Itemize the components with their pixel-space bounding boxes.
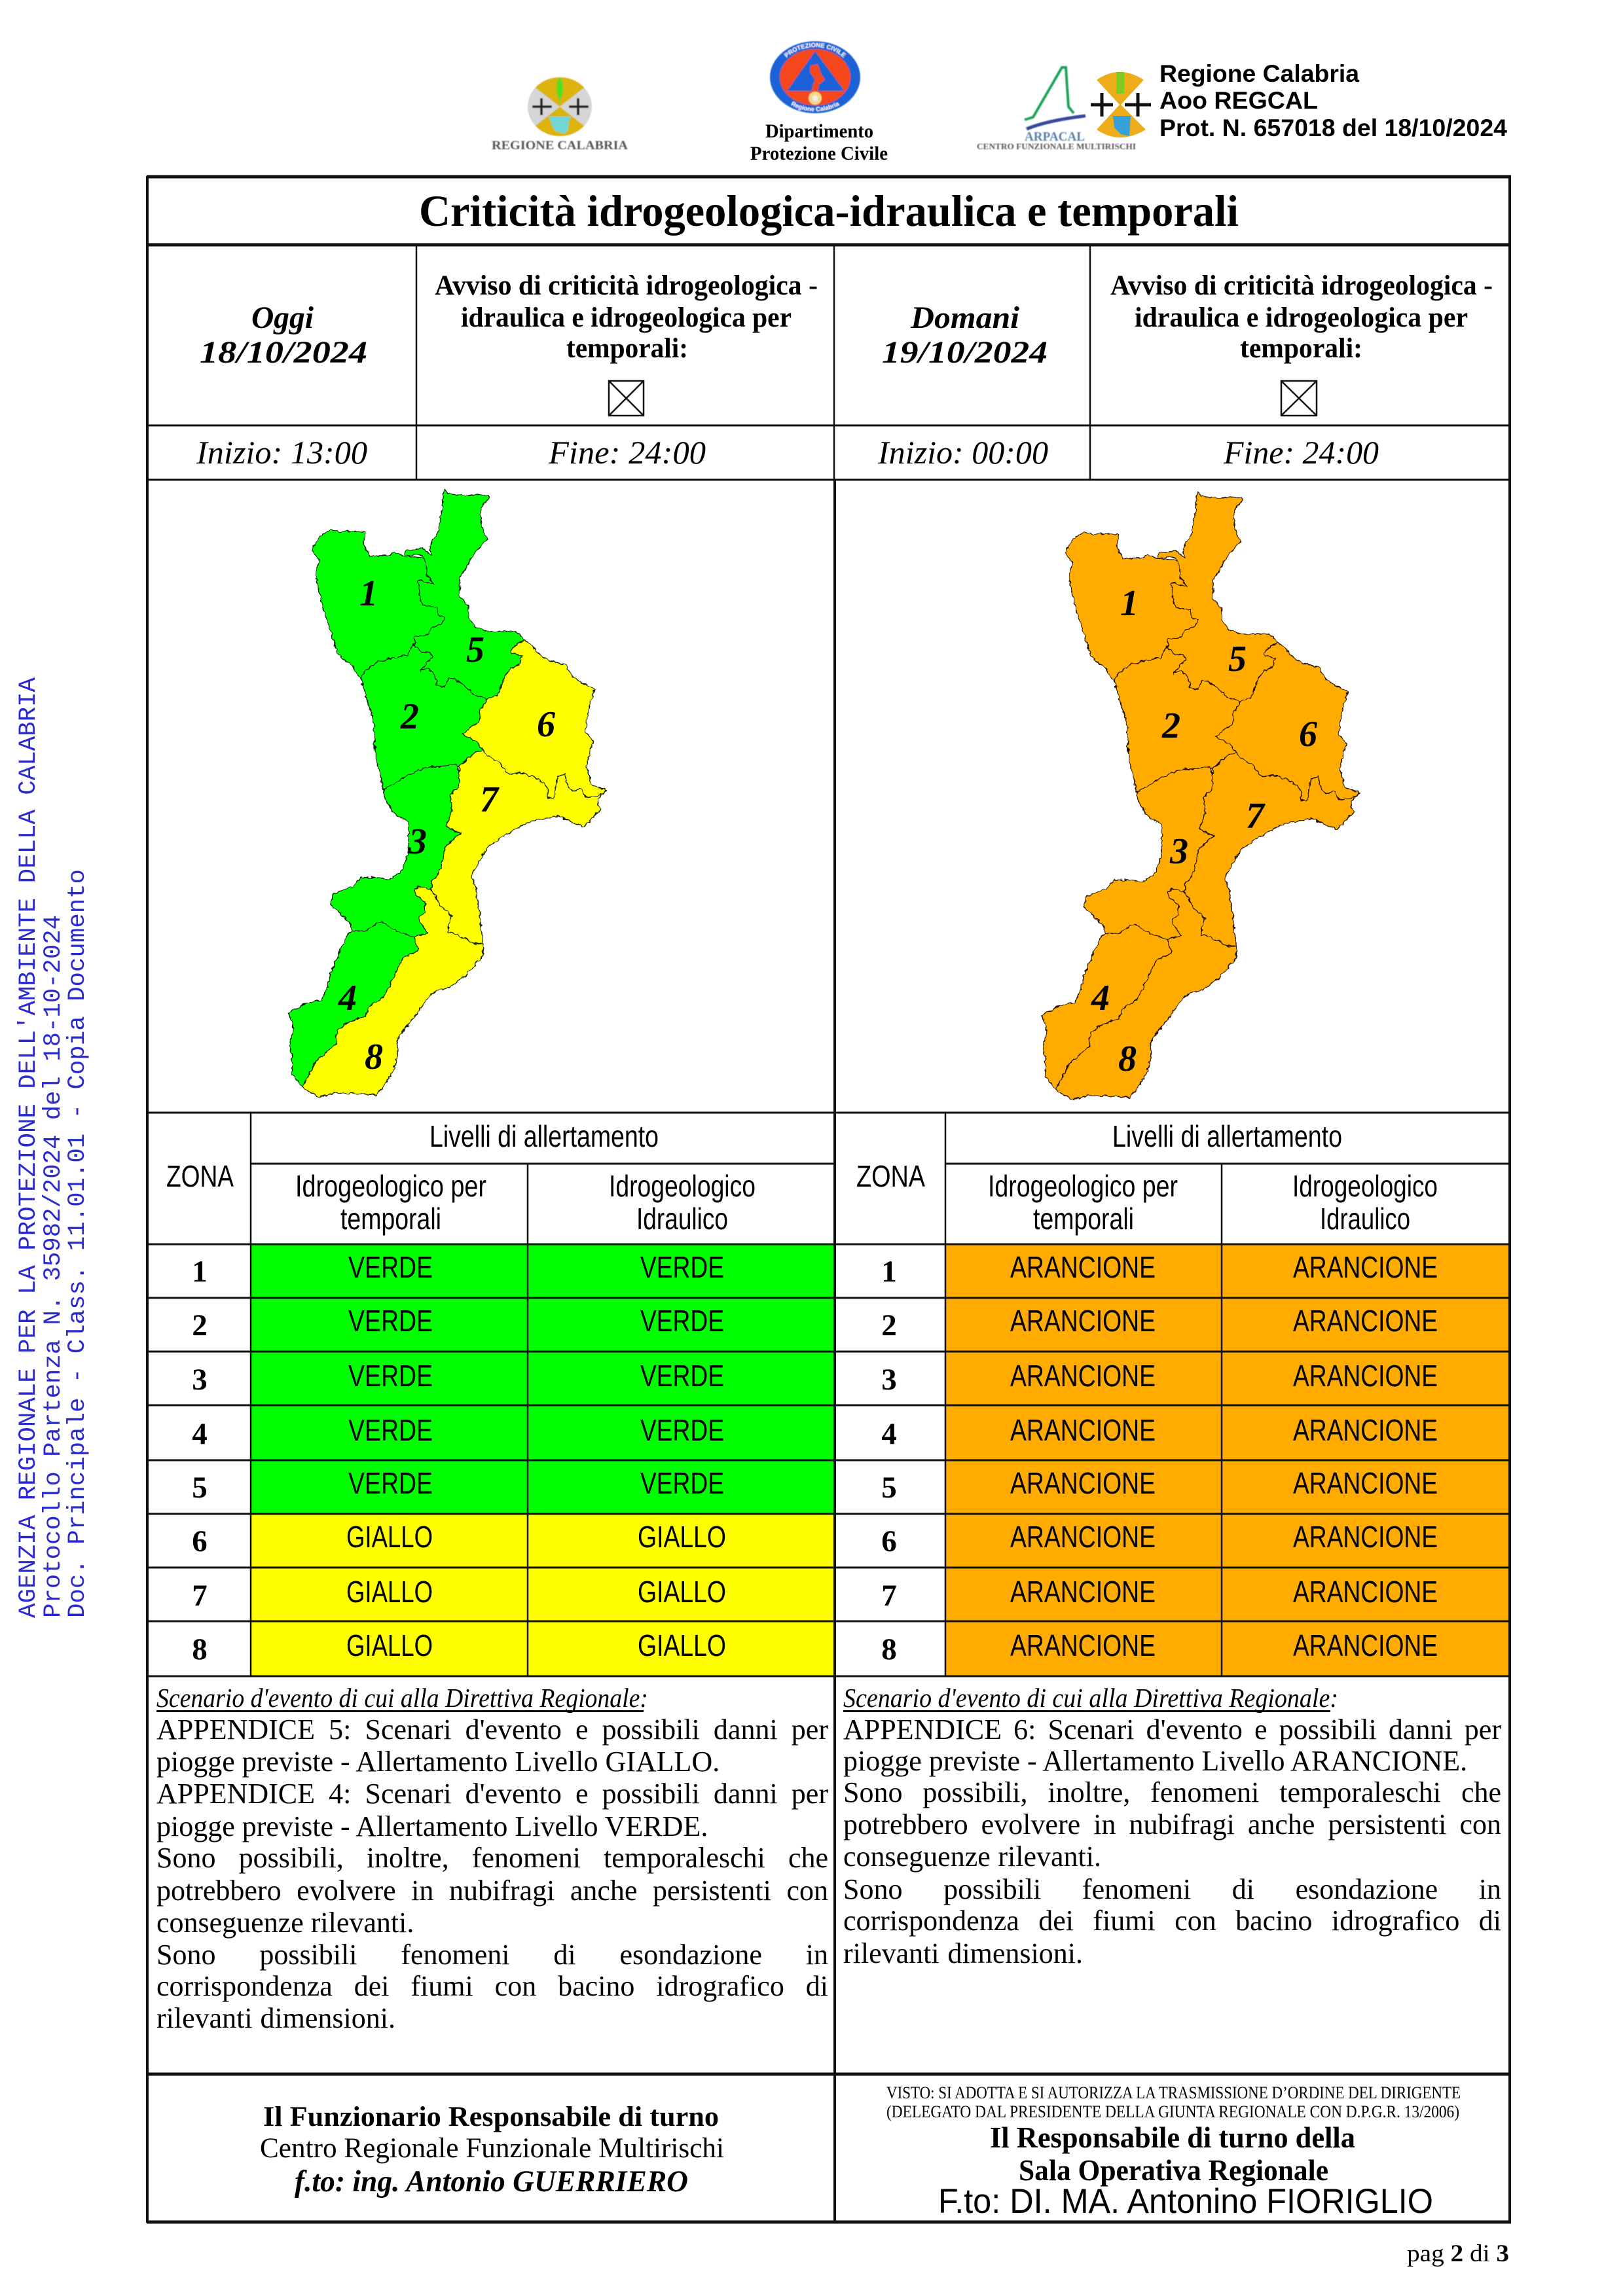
table: today alert levels: 8 bbox=[192, 1632, 208, 1666]
table: today alert levels: VERDE bbox=[640, 1304, 724, 1338]
table: today alert levels: GIALLO bbox=[638, 1575, 726, 1609]
logo: Protezione Civile: Regione Calabria bbox=[790, 101, 841, 113]
side protocol stamp: Doc. Principale - Class. 11.01.01 - Copia Documento bbox=[64, 869, 92, 1618]
table: tomorrow alert levels: 7 bbox=[881, 1579, 897, 1613]
table: today alert levels: ZONA bbox=[166, 1159, 234, 1193]
logo caption: Dipartimento Protezione Civile bbox=[750, 120, 888, 164]
map: today: 4 bbox=[338, 978, 357, 1018]
scenario text: today: APPENDICE 5: Scenari d'evento e possibili danni per bbox=[156, 1713, 828, 1746]
signature: operations room: Sala Operativa Regionale bbox=[1019, 2153, 1328, 2187]
scenario heading underlines bbox=[156, 1710, 1330, 1712]
date and notice row: tomorrow: Avviso di criticità idrogeologica - bbox=[1110, 270, 1493, 301]
table: tomorrow alert levels: 6 bbox=[881, 1524, 897, 1558]
table: today alert levels: VERDE bbox=[348, 1304, 433, 1338]
table: tomorrow alert levels bbox=[856, 1119, 1510, 1676]
scenario text: tomorrow: Sono possibili, inoltre, fenomeni temporaleschi che bbox=[843, 1776, 1501, 1808]
scenario text: today: piogge previste - Allertamento Livello GIALLO. bbox=[156, 1746, 720, 1778]
signature: functionary bbox=[260, 2102, 724, 2198]
table: tomorrow alert levels: temporali bbox=[1033, 1202, 1134, 1236]
map: today: 8 bbox=[365, 1037, 383, 1077]
start and end times bbox=[196, 434, 1379, 471]
scenario headings: Scenario d'evento di cui alla Direttiva Regionale: bbox=[156, 1683, 648, 1713]
table: tomorrow alert levels: ARANCIONE bbox=[1010, 1575, 1156, 1609]
table: tomorrow alert levels: 4 bbox=[881, 1417, 897, 1451]
scenario text: today: conseguenze rilevanti. bbox=[156, 1907, 414, 1939]
scenario headings: Scenario d'evento di cui alla Direttiva Regionale: bbox=[843, 1683, 1338, 1713]
table: today alert levels: GIALLO bbox=[638, 1520, 726, 1554]
table: today alert levels: 4 bbox=[192, 1417, 208, 1451]
table: tomorrow alert levels: ARANCIONE bbox=[1010, 1520, 1156, 1554]
table: today alert levels: temporali bbox=[340, 1202, 441, 1236]
map: tomorrow: 8 bbox=[1118, 1039, 1137, 1079]
table: tomorrow alert levels: ARANCIONE bbox=[1293, 1520, 1438, 1554]
table: tomorrow alert levels: Livelli di allertamento bbox=[1112, 1119, 1342, 1153]
start and end times: Inizio: 13:00 bbox=[196, 434, 367, 471]
scenario text: tomorrow: conseguenze rilevanti. bbox=[843, 1840, 1101, 1873]
side protocol stamp: AGENZIA REGIONALE PER LA PROTEZIONE DELL'AMBIENTE DELLA CALABRIA bbox=[15, 677, 43, 1618]
scenario text: today: potrebbero evolvere in nubifragi anche persistenti con bbox=[156, 1874, 828, 1907]
map: tomorrow: 4 bbox=[1091, 978, 1110, 1018]
scenario text: today: Sono possibili fenomeni di esondazione in bbox=[156, 1939, 828, 1971]
scenario text: today: Sono possibili, inoltre, fenomeni temporaleschi che bbox=[156, 1842, 828, 1874]
date and notice row: today: 18/10/2024 bbox=[200, 335, 367, 370]
frame and grid lines bbox=[147, 176, 1511, 2223]
table: tomorrow alert levels: ARANCIONE bbox=[1293, 1466, 1438, 1500]
map: today: 6 bbox=[537, 704, 555, 745]
table: today alert levels: 5 bbox=[192, 1471, 208, 1505]
table: today alert levels: 2 bbox=[192, 1308, 208, 1342]
table: today alert levels: VERDE bbox=[348, 1413, 433, 1447]
scenario text: today: APPENDICE 4: Scenari d'evento e possibili danni per bbox=[156, 1778, 828, 1810]
table: today alert levels: 3 bbox=[192, 1363, 208, 1397]
scenario text: today: corrispondenza dei fiumi con bacino idrografico di bbox=[156, 1970, 828, 2002]
map: today bbox=[289, 490, 606, 1097]
table: tomorrow alert levels: ARANCIONE bbox=[1010, 1359, 1156, 1393]
logo: ARPACAL: CENTRO FUNZIONALE MULTIRISCHI bbox=[977, 141, 1136, 151]
table: tomorrow alert levels: ARANCIONE bbox=[1010, 1304, 1156, 1338]
table: tomorrow alert levels: 3 bbox=[881, 1363, 897, 1397]
map: tomorrow bbox=[1042, 493, 1360, 1100]
table: tomorrow alert levels: 2 bbox=[881, 1308, 897, 1342]
table: today alert levels: GIALLO bbox=[638, 1628, 726, 1662]
date and notice row: tomorrow: Domani bbox=[910, 300, 1020, 335]
signature: operations room: VISTO: SI ADOTTA E SI AUTORIZZA LA TRASMISSIONE D’ORDINE DEL DIRIGENTE bbox=[886, 2083, 1461, 2102]
start and end times: Fine: 24:00 bbox=[1223, 434, 1379, 471]
start and end times: Inizio: 00:00 bbox=[877, 434, 1048, 471]
protocol header text: Regione Calabria bbox=[1159, 60, 1359, 87]
table: today alert levels: GIALLO bbox=[346, 1628, 433, 1662]
table: today alert levels: VERDE bbox=[348, 1466, 433, 1500]
table: tomorrow alert levels: Idrogeologico per bbox=[988, 1169, 1178, 1203]
map: today: 2 bbox=[400, 696, 419, 737]
scenario text: today: piogge previste - Allertamento Livello VERDE. bbox=[156, 1810, 708, 1842]
scenario text: tomorrow: rilevanti dimensioni. bbox=[843, 1937, 1083, 1969]
map: today: 5 bbox=[466, 630, 484, 670]
date and notice row: today bbox=[200, 270, 818, 416]
table: tomorrow alert levels: 1 bbox=[881, 1255, 897, 1289]
scenario text: tomorrow: Sono possibili fenomeni di esondazione in bbox=[843, 1873, 1501, 1905]
table: today alert levels: VERDE bbox=[640, 1359, 724, 1393]
scenario text: tomorrow: potrebbero evolvere in nubifragi anche persistenti con bbox=[843, 1808, 1501, 1840]
table: tomorrow alert levels: 5 bbox=[881, 1471, 897, 1505]
table: tomorrow alert levels: ARANCIONE bbox=[1010, 1413, 1156, 1447]
table: today alert levels: Idrogeologico per bbox=[295, 1169, 486, 1203]
signature: operations room: Il Responsabile di turno della bbox=[990, 2121, 1355, 2154]
table: tomorrow alert levels: ARANCIONE bbox=[1293, 1628, 1438, 1662]
signature: functionary: f.to: ing. Antonio GUERRIERO bbox=[295, 2164, 688, 2198]
table: today alert levels: Livelli di allertamento bbox=[429, 1119, 659, 1153]
protocol header text bbox=[1159, 60, 1507, 141]
protocol header text: Prot. N. 657018 del 18/10/2024 bbox=[1159, 115, 1507, 141]
map: tomorrow: 7 bbox=[1246, 796, 1266, 836]
signature: operations room bbox=[886, 2083, 1461, 2221]
date and notice row: today: Avviso di criticità idrogeologica - bbox=[435, 270, 818, 301]
start and end times: Fine: 24:00 bbox=[548, 434, 706, 471]
map: today: 3 bbox=[408, 821, 427, 862]
logo caption: Dipartimento Protezione Civile: Protezione Civile bbox=[750, 143, 888, 164]
table: tomorrow alert levels: ZONA bbox=[856, 1159, 925, 1193]
table: today alert levels: 1 bbox=[192, 1255, 208, 1289]
table: tomorrow alert levels: ARANCIONE bbox=[1010, 1466, 1156, 1500]
table: tomorrow alert levels: ARANCIONE bbox=[1293, 1250, 1438, 1284]
map: tomorrow: 3 bbox=[1169, 831, 1188, 872]
date and notice row: tomorrow bbox=[882, 270, 1493, 416]
map: tomorrow: 1 bbox=[1120, 583, 1139, 624]
table: tomorrow alert levels: ARANCIONE bbox=[1010, 1250, 1156, 1284]
table: tomorrow alert levels: Idraulico bbox=[1320, 1202, 1410, 1236]
date and notice row: today: Oggi bbox=[251, 300, 314, 335]
scenario text: tomorrow: piogge previste - Allertamento Livello ARANCIONE. bbox=[843, 1745, 1467, 1777]
table: today alert levels bbox=[166, 1119, 834, 1676]
signature: operations room: F.to: DI. MA. Antonino FIORIGLIO bbox=[938, 2182, 1433, 2221]
table: today alert levels: Idrogeologico bbox=[609, 1169, 756, 1203]
table: tomorrow alert levels: ARANCIONE bbox=[1293, 1304, 1438, 1338]
map: today: 1 bbox=[359, 573, 378, 614]
scenario text: today: rilevanti dimensioni. bbox=[156, 2002, 395, 2034]
table: today alert levels: VERDE bbox=[640, 1466, 724, 1500]
table: tomorrow alert levels: Idrogeologico bbox=[1292, 1169, 1438, 1203]
date and notice row: today: idraulica e idrogeologica per bbox=[461, 302, 792, 333]
map: today: 7 bbox=[480, 780, 500, 820]
logo: ARPACAL bbox=[977, 67, 1136, 151]
map: tomorrow: 2 bbox=[1161, 706, 1180, 746]
page number: pag 2 di 3 bbox=[1407, 2240, 1509, 2267]
logo: Regione Calabria: REGIONE CALABRIA bbox=[492, 139, 628, 152]
date and notice row: tomorrow: idraulica e idrogeologica per bbox=[1135, 302, 1468, 333]
table: today alert levels: GIALLO bbox=[346, 1575, 433, 1609]
table: today alert levels: 6 bbox=[192, 1524, 208, 1558]
map: tomorrow: 6 bbox=[1299, 714, 1317, 755]
signature: functionary: Il Funzionario Responsabile di turno bbox=[263, 2102, 719, 2132]
table: tomorrow alert levels: 8 bbox=[881, 1632, 897, 1666]
table: tomorrow alert levels: ARANCIONE bbox=[1293, 1359, 1438, 1393]
logo: Protezione Civile bbox=[769, 41, 862, 114]
logo: ARPACAL: ARPACAL bbox=[1025, 130, 1085, 144]
table: today alert levels: VERDE bbox=[348, 1250, 433, 1284]
scenario text: tomorrow: corrispondenza dei fiumi con bacino idrografico di bbox=[843, 1905, 1501, 1937]
table: today alert levels: VERDE bbox=[640, 1413, 724, 1447]
table: today alert levels: VERDE bbox=[640, 1250, 724, 1284]
scenario text: tomorrow: APPENDICE 6: Scenari d'evento e possibili danni per bbox=[843, 1713, 1501, 1746]
table: tomorrow alert levels: ARANCIONE bbox=[1010, 1628, 1156, 1662]
table: tomorrow alert levels: ARANCIONE bbox=[1293, 1575, 1438, 1609]
table: today alert levels: GIALLO bbox=[346, 1520, 433, 1554]
logo: coat of arms bbox=[1091, 72, 1151, 137]
title: Criticità idrogeologica-idraulica e temporali bbox=[419, 186, 1239, 236]
side protocol stamp bbox=[15, 677, 92, 1618]
scenario text: today bbox=[156, 1713, 828, 2034]
date and notice row: today: temporali: bbox=[566, 333, 688, 364]
map: tomorrow: 5 bbox=[1228, 639, 1247, 679]
table: tomorrow alert levels: ARANCIONE bbox=[1293, 1413, 1438, 1447]
scenario text: tomorrow bbox=[843, 1713, 1501, 1969]
scenario headings bbox=[156, 1683, 1338, 1713]
logo: Regione Calabria bbox=[491, 76, 629, 150]
signature: functionary: Centro Regionale Funzionale Multirischi bbox=[260, 2133, 724, 2164]
date and notice row: tomorrow: temporali: bbox=[1240, 333, 1362, 364]
signature: operations room: (DELEGATO DAL PRESIDENTE DELLA GIUNTA REGIONALE CON D.P.G.R. 13/2006) bbox=[886, 2102, 1459, 2121]
table: today alert levels: Idraulico bbox=[636, 1202, 728, 1236]
side protocol stamp: Protocollo Partenza N. 35982/2024 del 18-10-2024 bbox=[40, 915, 67, 1618]
logo caption: Dipartimento Protezione Civile: Dipartimento bbox=[765, 120, 873, 142]
logo: Protezione Civile: PROTEZIONE CIVILE bbox=[783, 42, 847, 59]
table: today alert levels: VERDE bbox=[348, 1359, 433, 1393]
date and notice row: tomorrow: 19/10/2024 bbox=[882, 335, 1048, 370]
table: today alert levels: 7 bbox=[192, 1579, 208, 1613]
protocol header text: Aoo REGCAL bbox=[1159, 87, 1318, 114]
